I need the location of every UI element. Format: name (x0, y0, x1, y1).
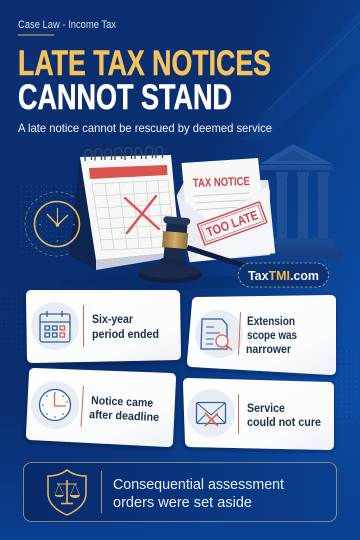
card text: scope was (247, 330, 297, 342)
icon: calendar (31, 302, 79, 350)
panel: conclusion (24, 462, 336, 522)
eyebrow: Case Law - Income Tax (18, 19, 116, 36)
icon: document with magnifier (195, 310, 243, 358)
icon: gavel (138, 216, 268, 283)
icon: clock (31, 381, 79, 429)
card text: period ended (92, 329, 159, 341)
icon: envelope with cross (187, 389, 235, 437)
red cross (125, 196, 159, 233)
calendar header bar (89, 165, 168, 179)
card text: Service (247, 403, 285, 415)
icon: desk calendar with red cross (69, 147, 180, 270)
card: six-year period ended (31, 295, 176, 358)
logo pill: TaxTMI.com (238, 263, 328, 287)
conclusion text (113, 476, 285, 511)
title (18, 44, 271, 117)
card text (89, 395, 159, 424)
eyebrow: Case Law - Income Tax: Case Law - Income Tax (18, 19, 116, 31)
envelope front (177, 185, 275, 262)
conclusion text: Consequential assessment (113, 476, 285, 493)
card: service could not cure (187, 383, 329, 445)
calendar grid (92, 180, 175, 250)
title: CANNOT STAND (18, 78, 232, 117)
icon: shield with scales (48, 470, 86, 515)
card text: narrower (246, 344, 291, 356)
title: LATE TAX NOTICES (18, 44, 271, 83)
card: notice came after deadline (31, 373, 171, 442)
card text: could not cure (247, 417, 321, 429)
conclusion text: orders were set aside (113, 494, 252, 511)
stamp: too late: TOO LATE (204, 207, 260, 240)
card: extension scope was narrower (192, 300, 331, 370)
icon: courthouse (260, 144, 343, 259)
card text (92, 314, 159, 341)
subtitle: A late notice cannot be rescued by deemed service (18, 121, 272, 135)
card text (247, 403, 321, 429)
icon: clock (34, 202, 80, 246)
notice paper: TAX NOTICE (193, 174, 250, 190)
calendar rings (85, 147, 162, 161)
card text: Notice came (91, 395, 153, 410)
icon: envelope with tax notice (177, 158, 275, 262)
logo pill: TaxTMI.com: TaxTMI.com (248, 268, 319, 283)
card text: after deadline (89, 409, 159, 424)
card text: Extension (247, 316, 295, 328)
card text: Six-year (92, 314, 133, 326)
card text (246, 316, 297, 356)
